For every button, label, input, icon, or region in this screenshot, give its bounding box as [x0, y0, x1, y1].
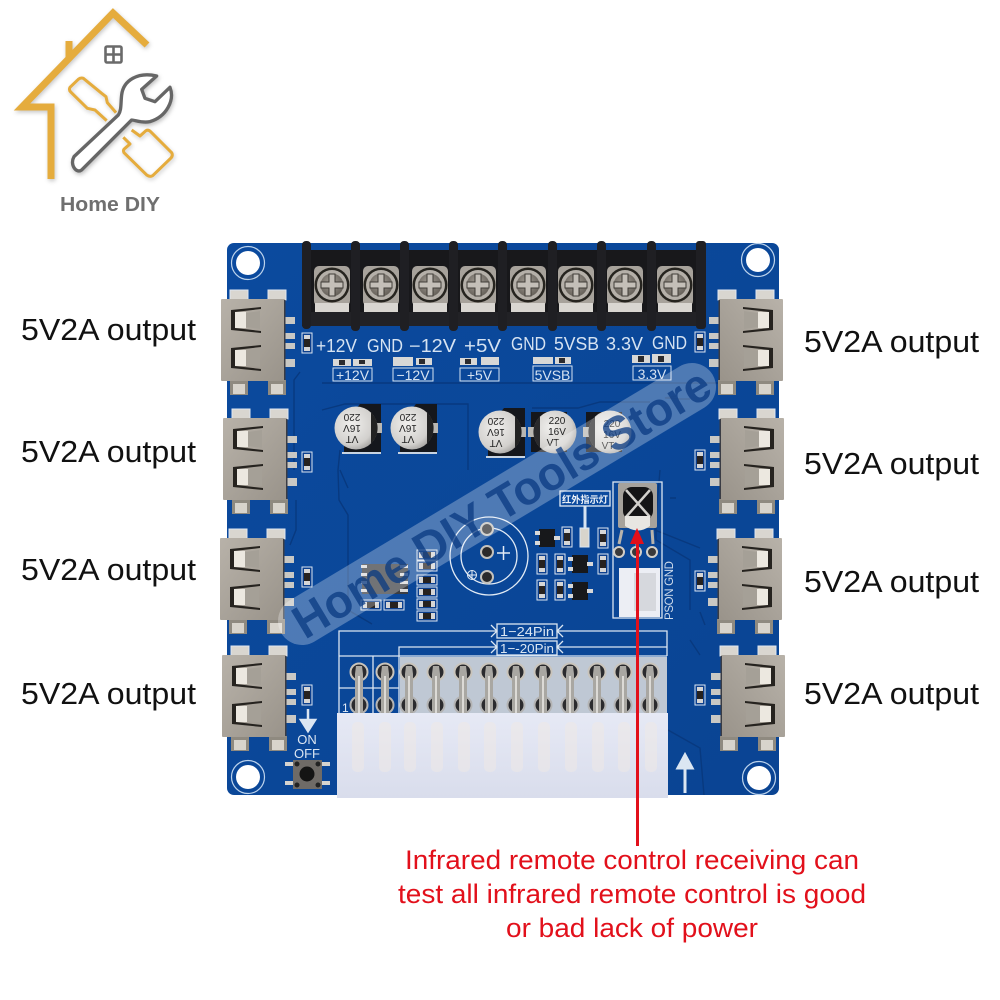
- filter capacitor footprint: [450, 517, 528, 595]
- terminal silkscreen labels: −12V: [409, 336, 456, 356]
- ATX connector: [337, 713, 668, 798]
- capacitors: VT: [346, 433, 358, 444]
- terminal silkscreen labels: +5V: [464, 336, 501, 356]
- LED indicator labels: +5V: [467, 367, 493, 383]
- LED indicator labels: +12V: [336, 367, 370, 383]
- board substrate: [227, 243, 779, 795]
- capacitors: 220: [399, 411, 416, 422]
- icon: screwdriver: [69, 78, 172, 176]
- callout text: [398, 845, 866, 943]
- ON/OFF switch: ON: [297, 732, 317, 747]
- pin labels 1-24 and 1-20: 1−-20Pin: [500, 641, 554, 656]
- capacitors: 16V: [548, 427, 566, 438]
- capacitors: 220: [487, 415, 504, 426]
- capacitors: 16V: [487, 426, 505, 437]
- terminal block: [302, 241, 706, 331]
- panel: circuit board: [220, 241, 785, 798]
- LED indicator labels: [333, 354, 671, 383]
- icon: house outline: [22, 13, 147, 179]
- arrow: infrared receiver callout: [630, 528, 644, 846]
- terminal silkscreen labels: GND: [367, 336, 403, 356]
- left output labels: 5V2A output: [21, 552, 196, 587]
- copper traces: [290, 372, 720, 795]
- right output labels: 5V2A output: [804, 446, 979, 481]
- capacitors: 16V: [399, 422, 417, 433]
- right output labels: 5V2A output: [804, 676, 979, 711]
- IR indicator label: 红外指示灯: [562, 494, 608, 506]
- callout text: or bad lack of power: [506, 913, 758, 943]
- IC and small components: [361, 527, 608, 621]
- left output labels: 5V2A output: [21, 312, 196, 347]
- capacitors: 16V: [603, 430, 621, 441]
- left output labels: 5V2A output: [21, 676, 196, 711]
- IR indicator label: [560, 491, 610, 529]
- mounting holes: [232, 244, 776, 794]
- terminal silkscreen labels: 3.3V: [606, 334, 643, 354]
- logo wordmark: Home DIY: [60, 194, 161, 216]
- icon: window: [106, 46, 122, 62]
- capacitors: VT: [490, 437, 502, 448]
- pin labels 1-24 and 1-20: 1−24Pin: [500, 624, 554, 639]
- callout text: test all infrared remote control is good: [398, 879, 866, 909]
- capacitors: 220: [343, 411, 360, 422]
- right output labels: 5V2A output: [804, 324, 979, 359]
- terminal silkscreen labels: [316, 333, 687, 356]
- terminal silkscreen labels: +12V: [316, 336, 357, 356]
- capacitors: [334, 404, 632, 458]
- ON/OFF switch: [285, 709, 330, 789]
- capacitors: VT: [602, 441, 614, 452]
- USB ports right: [695, 290, 785, 751]
- PSON GND label: PSON GND: [664, 561, 676, 620]
- capacitors: 220: [604, 419, 621, 430]
- capacitors: VT: [402, 433, 414, 444]
- capacitors: 220: [549, 416, 566, 427]
- USB ports left: [220, 290, 312, 751]
- PSON connector: [619, 561, 676, 620]
- logo: Home DIY: [22, 13, 172, 216]
- left output labels: 5V2A output: [21, 434, 196, 469]
- capacitors: VT: [547, 438, 559, 449]
- right output labels: [804, 324, 979, 711]
- LED indicator labels: −12V: [396, 367, 430, 383]
- ON/OFF switch: OFF: [294, 746, 320, 761]
- icon: wrench: [73, 75, 171, 171]
- callout text: Infrared remote control receiving can: [405, 845, 859, 875]
- right output labels: 5V2A output: [804, 564, 979, 599]
- arrow: down to switch: [301, 709, 315, 731]
- pin labels 1-24 and 1-20: [339, 624, 667, 715]
- LED indicator labels: 5VSB: [535, 367, 570, 383]
- LED indicator labels: 3.3V: [638, 366, 667, 382]
- terminal silkscreen labels: GND: [652, 333, 687, 353]
- capacitors: 16V: [343, 422, 361, 433]
- left output labels: [21, 312, 196, 711]
- pin labels 1-24 and 1-20: 1: [342, 701, 349, 715]
- IR receiver: [613, 482, 662, 618]
- terminal silkscreen labels: 5VSB: [554, 334, 599, 354]
- watermark: Home DIY Tools Store: [283, 357, 720, 649]
- terminal silkscreen labels: GND: [511, 334, 546, 354]
- ATX pins: [350, 664, 658, 714]
- arrow: up silkscreen: [678, 755, 692, 793]
